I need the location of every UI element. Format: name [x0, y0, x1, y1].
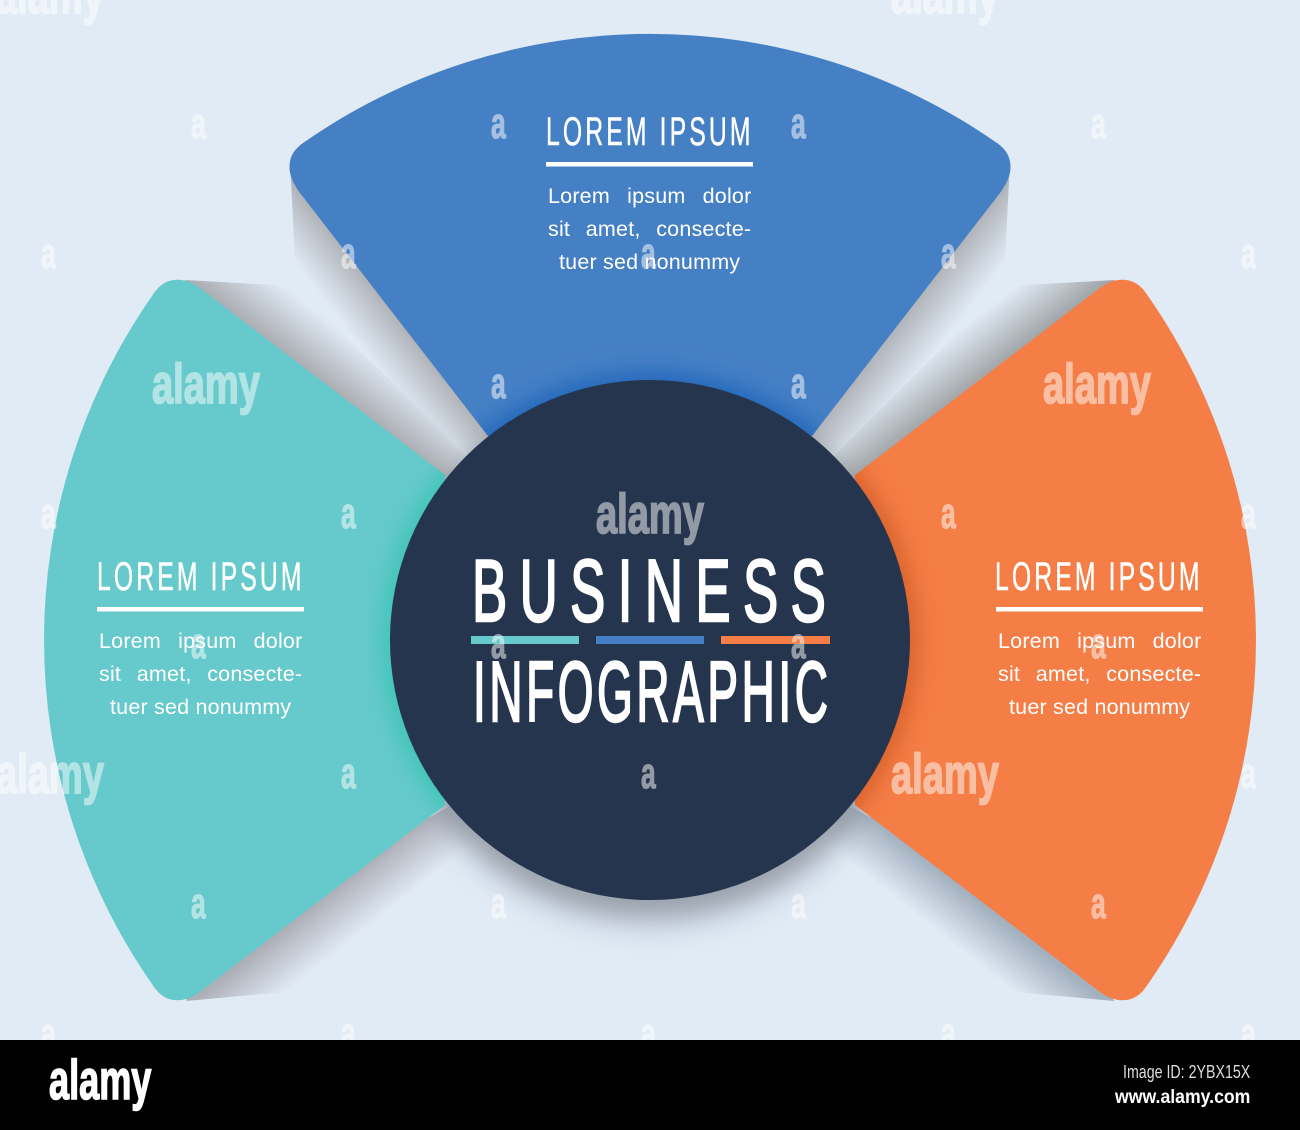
watermark letters: a: [191, 618, 206, 668]
watermark letters: a: [641, 1008, 656, 1058]
watermark letters: a: [341, 1008, 356, 1058]
watermark letters: a: [41, 228, 56, 278]
watermark letters: a: [791, 358, 806, 408]
text block: right panel: tuer sed nonummy: [1009, 695, 1190, 719]
watermark logos: [0, 0, 1151, 806]
watermark letters: a: [191, 878, 206, 928]
text block: left panel: [97, 555, 305, 719]
text block: left panel: Lorem ipsum dolor: [99, 629, 302, 653]
watermark letters: a: [491, 358, 506, 408]
watermark letters: a: [41, 1008, 56, 1058]
footer bar: alamy: [49, 1048, 151, 1111]
watermark letters: a: [491, 878, 506, 928]
watermark logos: alamy: [1043, 354, 1151, 416]
watermark letters: a: [791, 878, 806, 928]
watermark letters: a: [1091, 618, 1106, 668]
panel: right orange: [855, 280, 1256, 1000]
watermark letters: a: [791, 98, 806, 148]
title: business infographic: [471, 542, 838, 740]
watermark letters: a: [491, 98, 506, 148]
text block: left panel: LOREM IPSUM: [97, 555, 305, 600]
watermark letters: a: [1091, 98, 1106, 148]
text block: top panel: [546, 110, 754, 274]
text block: right panel: Lorem ipsum dolor: [998, 629, 1201, 653]
watermark letters: a: [791, 618, 806, 668]
text block: right panel: sit amet, consecte-: [998, 662, 1201, 686]
fold shadows behind panels: [185, 160, 1115, 1001]
panel: left teal: [44, 280, 445, 1000]
watermark letters: a: [1241, 228, 1256, 278]
watermark letters: a: [341, 748, 356, 798]
watermark letters: a: [341, 488, 356, 538]
watermark letters: a: [641, 228, 656, 278]
footer bar: Image ID: 2YBX15X: [1123, 1062, 1250, 1082]
footer bar: [0, 1040, 1300, 1130]
watermark letters: a: [941, 1008, 956, 1058]
title: business infographic: INFOGRAPHIC: [473, 645, 832, 740]
text block: left panel: sit amet, consecte-: [99, 662, 302, 686]
watermark letters: a: [941, 228, 956, 278]
text block: top panel: LOREM IPSUM: [546, 110, 754, 155]
text block: top panel: sit amet, consecte-: [548, 217, 751, 241]
watermark letters: a: [1241, 748, 1256, 798]
panel: top blue: [290, 34, 1010, 436]
title: business infographic: BUSINESS: [472, 542, 838, 640]
text block: right panel: [995, 555, 1203, 719]
watermark logos: alamy: [891, 744, 999, 806]
watermark letters: a: [41, 488, 56, 538]
text block: right panel: LOREM IPSUM: [995, 555, 1203, 600]
text block: left panel: tuer sed nonummy: [110, 695, 291, 719]
text block: top panel: tuer sed nonummy: [559, 250, 740, 274]
center circle: [390, 380, 910, 900]
circle drop shadow: [388, 388, 912, 924]
text block: top panel: Lorem ipsum dolor: [548, 184, 751, 208]
watermark letters: a: [341, 228, 356, 278]
watermark letters: [41, 98, 1256, 1058]
watermark logos: alamy: [596, 484, 704, 546]
footer bar: www.alamy.com: [1114, 1085, 1250, 1107]
watermark letters: a: [491, 618, 506, 668]
watermark letters: a: [1241, 488, 1256, 538]
watermark logos: alamy: [152, 354, 260, 416]
watermark letters: a: [1091, 878, 1106, 928]
watermark letters: a: [641, 748, 656, 798]
watermark letters: a: [1241, 1008, 1256, 1058]
watermark letters: a: [191, 98, 206, 148]
watermark letters: a: [941, 488, 956, 538]
